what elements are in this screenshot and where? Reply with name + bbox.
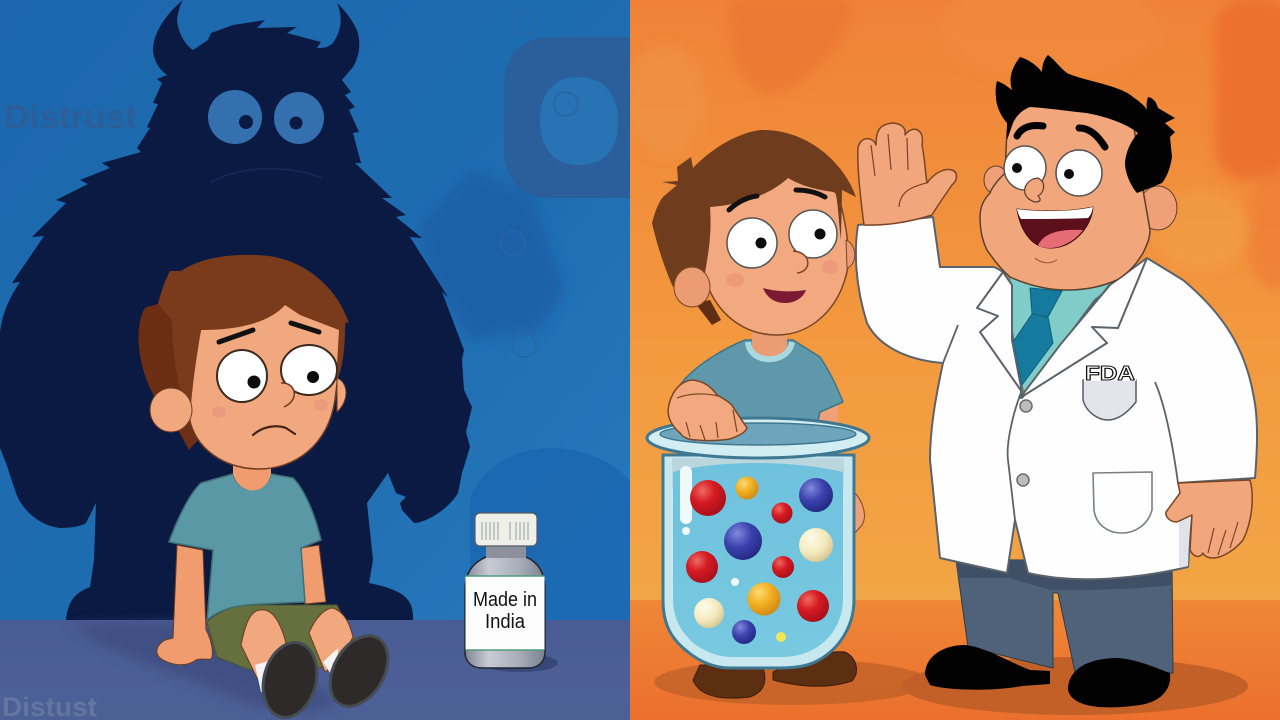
right arm <box>301 545 326 604</box>
monster silhouette <box>0 0 472 620</box>
teeth <box>1017 207 1093 219</box>
shorts <box>207 605 360 670</box>
cheeks <box>212 399 328 418</box>
eyebrows <box>1017 125 1105 147</box>
bottle cap <box>475 513 537 546</box>
hair back tail <box>178 422 198 450</box>
trousers <box>956 560 1173 673</box>
bottle: Made in India <box>465 513 558 672</box>
right shoe <box>328 634 390 708</box>
jar body <box>663 455 854 668</box>
face <box>189 303 345 469</box>
left lapel <box>977 272 1022 392</box>
far sleeve arm <box>818 405 838 425</box>
coat front line <box>943 325 1178 520</box>
nose <box>793 251 808 273</box>
socks <box>255 648 338 695</box>
floor shadow: doctor <box>902 657 1248 715</box>
coat buttons <box>1017 400 1032 486</box>
doctor <box>856 55 1257 707</box>
right ear <box>1139 186 1177 230</box>
hair tail <box>695 300 721 325</box>
shirt <box>169 474 321 620</box>
coat shade strip <box>1179 516 1190 568</box>
neck <box>233 466 271 490</box>
face <box>703 176 848 335</box>
bottle label <box>466 576 544 650</box>
panel: distrust (blue side) <box>0 0 630 720</box>
jar rim <box>647 418 869 458</box>
jar air gap <box>672 458 844 488</box>
trouser shade <box>956 560 1172 590</box>
right lapel <box>1020 258 1147 398</box>
monster frown <box>210 169 322 183</box>
arm behind jar <box>854 492 864 534</box>
sad boy <box>139 255 400 720</box>
shirt <box>1010 275 1110 395</box>
lower hand <box>1166 480 1252 558</box>
chest pocket with FDA: FDA <box>1085 363 1135 385</box>
panel: trust (orange side) <box>625 0 1280 720</box>
open smile <box>1017 207 1093 248</box>
monster eyes <box>208 90 324 144</box>
neck <box>752 325 787 359</box>
hand finger lines <box>677 394 737 440</box>
left shoe <box>693 665 765 698</box>
eyebrows <box>729 190 825 210</box>
floor shadow under boy <box>70 622 340 712</box>
smile <box>763 288 806 303</box>
finger lines <box>1208 522 1238 555</box>
pills <box>686 476 833 644</box>
floor <box>630 600 1280 720</box>
right ear <box>846 240 855 268</box>
eyebrows <box>219 323 319 342</box>
jar opening <box>660 423 856 445</box>
tie <box>1013 288 1062 385</box>
faint word: Distrust (upper): Distrust <box>4 98 137 135</box>
face <box>980 95 1150 290</box>
jar of pills <box>647 380 869 668</box>
doctor head <box>980 55 1177 290</box>
label green bands <box>466 576 544 650</box>
happy boy <box>652 130 864 698</box>
lower pocket <box>1093 472 1152 533</box>
jar highlight <box>680 466 739 586</box>
hair shadow <box>138 304 180 396</box>
background blotches <box>418 10 630 620</box>
bottle neck <box>486 546 526 558</box>
bottle label text line 2: India <box>485 611 526 633</box>
boy's hand on rim <box>668 380 747 441</box>
chest pocket with FDA <box>1083 362 1136 420</box>
chin line <box>1035 258 1057 263</box>
collar <box>748 342 792 359</box>
frown <box>253 426 295 435</box>
hair <box>996 55 1175 193</box>
floor shadow: boy <box>654 659 930 705</box>
background blotches <box>625 0 1280 290</box>
eyes <box>217 345 337 402</box>
right shoe <box>773 652 856 686</box>
raised hand <box>858 123 956 225</box>
nose <box>281 383 294 407</box>
shirt <box>680 340 843 425</box>
hair <box>138 254 349 403</box>
floor <box>0 620 630 720</box>
left ear <box>150 388 192 432</box>
left shoe <box>262 641 318 719</box>
right ear <box>337 378 346 412</box>
white coat <box>856 217 1257 579</box>
cap ridges <box>482 522 528 540</box>
nose <box>1025 178 1044 202</box>
left leg <box>241 610 287 678</box>
hair <box>652 130 856 287</box>
right leg <box>309 608 353 672</box>
bottle shadow <box>491 656 558 672</box>
eyes <box>1004 146 1102 196</box>
bottle body <box>465 557 545 668</box>
left ear <box>674 267 710 307</box>
left ear <box>984 166 1008 194</box>
palm lines <box>871 134 926 207</box>
bottle label text: Made in <box>473 589 537 611</box>
tongue <box>1038 230 1083 248</box>
right shoe <box>1068 658 1170 707</box>
left shoe <box>925 645 1050 690</box>
cheeks <box>726 260 838 287</box>
water <box>673 463 843 657</box>
eyes <box>727 210 837 268</box>
left arm and hand <box>157 545 212 665</box>
